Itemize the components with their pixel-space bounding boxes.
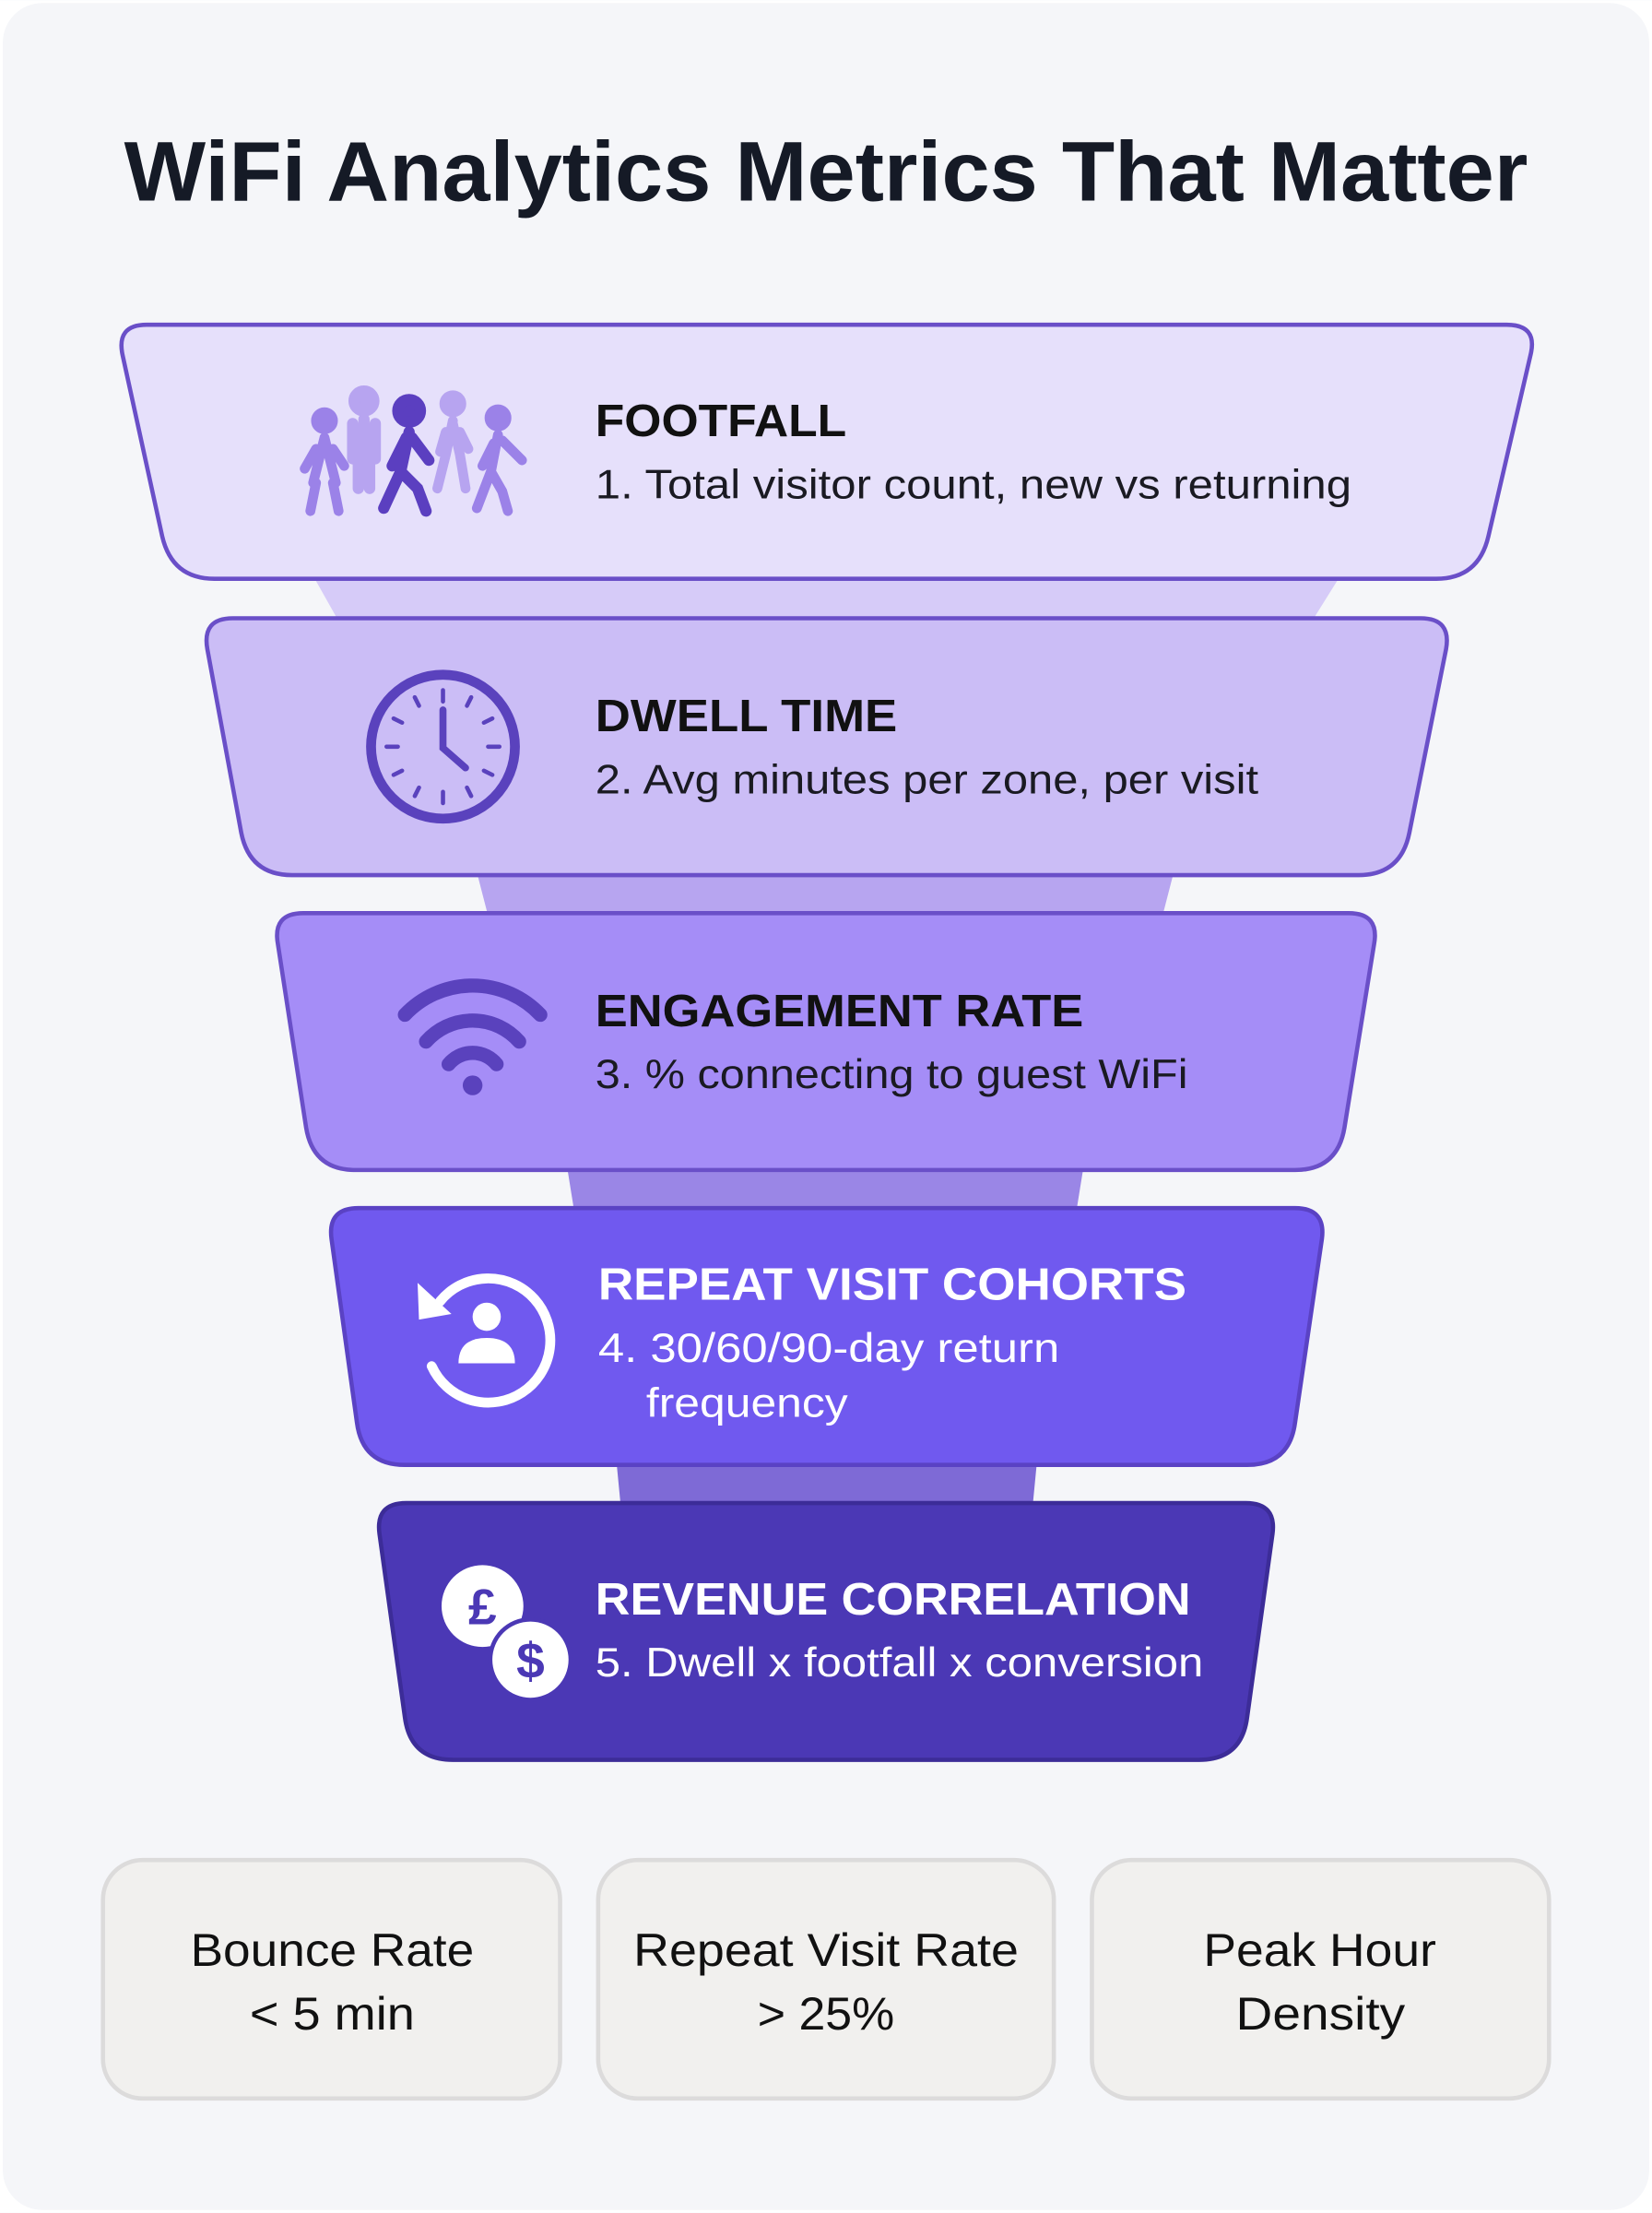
- stat card: repeat visit rate: > 25%: [758, 1987, 894, 2040]
- stat card: peak hour density: Density: [1236, 1987, 1406, 2040]
- panel: revenue correlation: [379, 1503, 1273, 1760]
- icon: currency coins: $: [516, 1632, 545, 1689]
- icon: currency coins: £: [468, 1579, 497, 1636]
- heading: dwell time: DWELL TIME: [596, 692, 897, 741]
- stat card: bounce rate: < 5 min: [250, 1987, 415, 2040]
- stat card: bounce rate: [103, 1860, 560, 2099]
- text: repeat cohorts description: frequency: [646, 1381, 849, 1426]
- panel: footfall: [122, 325, 1532, 579]
- stat card: bounce rate: Bounce Rate: [191, 1923, 474, 1976]
- text: engagement description: 3. % connecting to guest WiFi: [596, 1052, 1188, 1097]
- heading: engagement rate: ENGAGEMENT RATE: [596, 987, 1083, 1036]
- text: dwell time description: 2. Avg minutes per zone, per visit: [596, 757, 1258, 802]
- connector: tier4 to tier5: [617, 1462, 1037, 1506]
- stat card: repeat visit rate: [598, 1860, 1054, 2099]
- heading: revenue correlation: REVENUE CORRELATION: [596, 1575, 1191, 1625]
- panel: engagement rate: [277, 913, 1375, 1170]
- icon: wifi: [405, 986, 540, 1095]
- text: revenue description: 5. Dwell x footfall x conversion: [596, 1640, 1203, 1686]
- icon: currency coins: [442, 1565, 572, 1702]
- heading: footfall: FOOTFALL: [596, 396, 846, 446]
- connector: tier1 to tier2: [313, 576, 1340, 621]
- panel: repeat visit cohorts: [331, 1208, 1322, 1465]
- text: repeat cohorts description: [598, 1326, 1059, 1426]
- text: footfall description: 1. Total visitor count, new vs returning: [596, 462, 1351, 507]
- connector: tier3 to tier4: [567, 1167, 1083, 1211]
- stat card: repeat visit rate: Repeat Visit Rate: [633, 1923, 1019, 1976]
- panel: dwell time: [206, 619, 1447, 875]
- icon: people walking: [305, 391, 522, 511]
- stat card: peak hour density: Peak Hour: [1203, 1923, 1436, 1976]
- stat card: peak hour density: [1092, 1860, 1549, 2099]
- connector: tier2 to tier3: [477, 872, 1174, 916]
- icon: clock: [371, 675, 515, 819]
- heading: repeat visit cohorts: REPEAT VISIT COHORTS: [598, 1260, 1186, 1310]
- icon: repeat user: [418, 1278, 550, 1402]
- text: repeat cohorts description: 4. 30/60/90-day return: [598, 1326, 1059, 1371]
- title: WiFi Analytics Metrics That Matter: [124, 125, 1528, 219]
